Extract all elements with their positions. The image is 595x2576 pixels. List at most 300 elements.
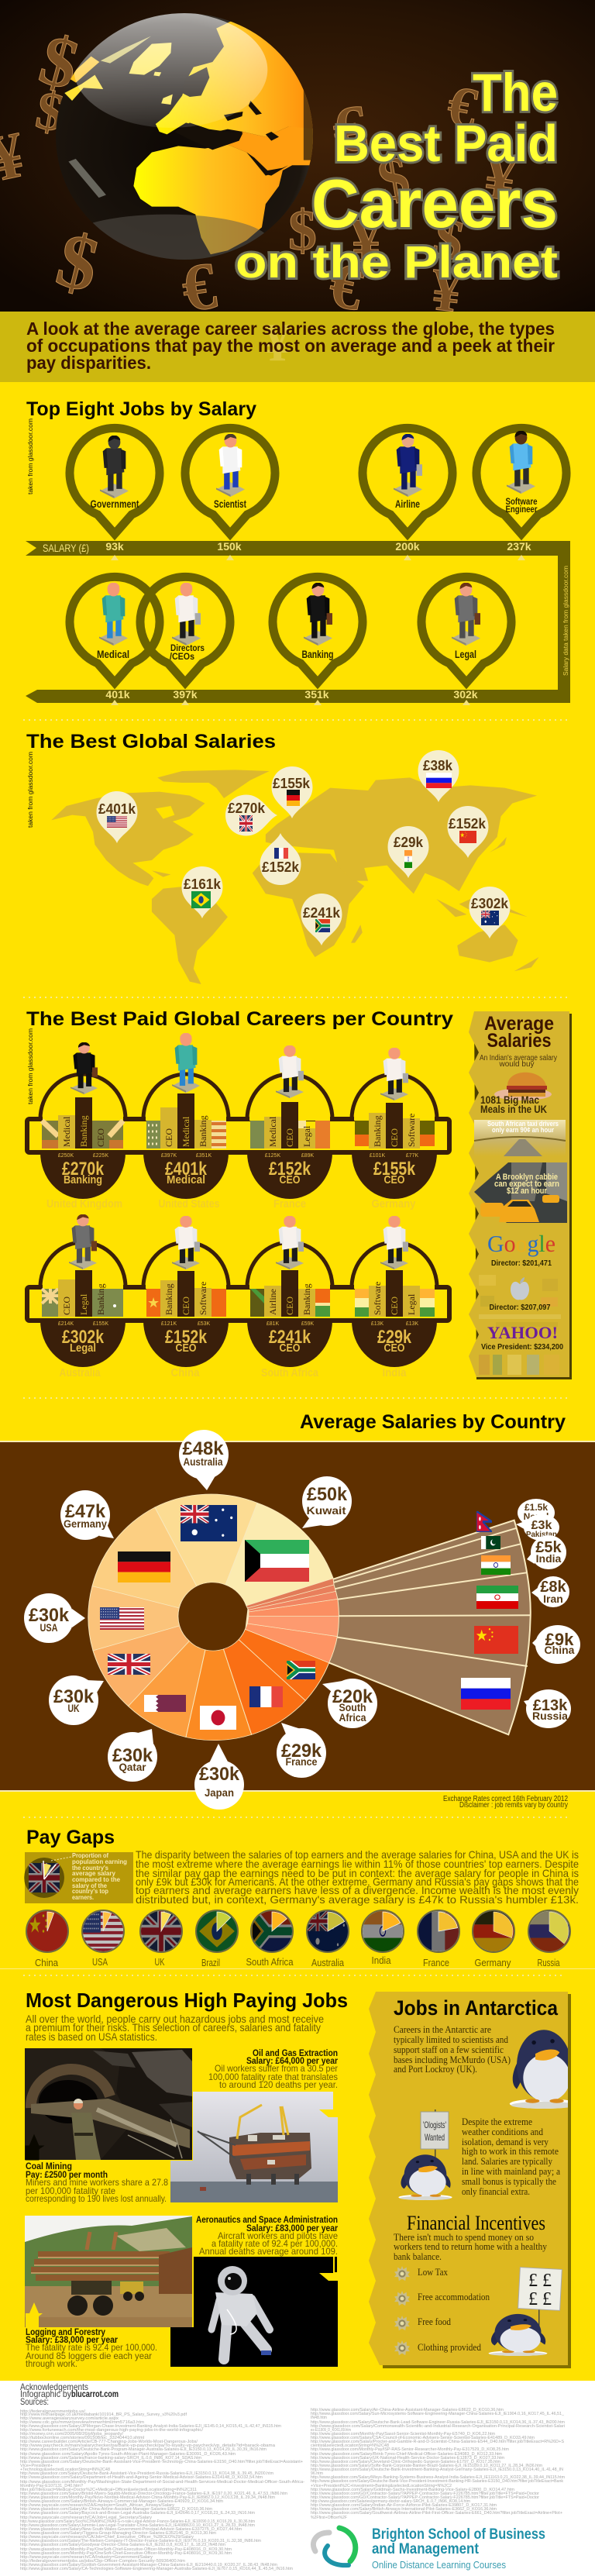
- sources right column: http://www.glassdoor.com/Salary/Southwest-Airlines-Airline-Pilot-First-Officer-Salaries-E661_D40.htm?filter.jobTitleExact=Airline+Pilot+: [311, 2511, 562, 2516]
- unit: France: [247, 1045, 332, 1211]
- marker: South Africa: [301, 894, 342, 945]
- unit: France: £152k: [269, 1159, 311, 1180]
- heading: Average: [484, 1013, 554, 1035]
- seas: [182, 67, 209, 97]
- unit: Australia: £214K: [58, 1321, 74, 1327]
- text: logging: through work.: [26, 2358, 77, 2369]
- paragraph: distributed but, in context, Germany's average salary is £47k to Russia's humbler £13k.: [136, 1893, 579, 1906]
- sources left column: http://federalgovernmentjobs.us/: [20, 2409, 86, 2414]
- flag backdrop: [42, 1121, 123, 1149]
- currency symbols: €: [328, 91, 370, 167]
- legend box: Proportion of: [72, 1851, 108, 1859]
- heading: The Best Paid Global Careers per Country: [26, 1008, 453, 1030]
- text: aeronautics: Aircraft workers and pilots have: [218, 2230, 338, 2241]
- bubble: Germany: £47k: [65, 1501, 106, 1522]
- bubble: Japan: £30k: [199, 1764, 240, 1785]
- logo: Brighton School: Online Distance Learning Courses: [372, 2559, 506, 2571]
- gloss: [74, 12, 267, 128]
- logo: Google: Director: $201,471: [491, 1259, 552, 1268]
- logo: Brighton School: Brighton School of Business: [372, 2526, 545, 2543]
- gap: India: India: [372, 1954, 391, 1966]
- gap: South Africa: South Africa: [246, 1956, 294, 1968]
- job pin: Government: [70, 428, 160, 534]
- heading: [484, 1013, 554, 1052]
- bubble: Kuwait: £50k: [307, 1484, 348, 1505]
- text: coal mining: corresponding to 190 lives lost annually.: [26, 2193, 167, 2204]
- intro: All over the world, people carry out hazardous jobs and most receive: [26, 2013, 324, 2025]
- currency symbols: €: [323, 248, 370, 325]
- text: oil and gas: 100,000 fatality rate that translates: [208, 2071, 338, 2082]
- sources left column: http://www.payscale.com/research/CA/Job=Chief_Executive_Officer_%28CEO%29/Salary: [20, 2535, 194, 2540]
- item: clothing provided: [394, 2340, 481, 2355]
- photo: coal mine: [25, 2048, 192, 2160]
- unit: United Kingdom: £250K: [58, 1153, 74, 1159]
- unit: France: Medical: [267, 1116, 278, 1147]
- logo: Apple: Director: $207,097: [490, 1303, 551, 1312]
- unit: United States: Medical: [167, 1173, 205, 1186]
- salary timeline: SALARY (£): [43, 542, 89, 554]
- bubble: South Africa: £20k: [332, 1686, 373, 1707]
- arrow: logging: [26, 2302, 43, 2327]
- legend box: the country's: [72, 1864, 108, 1872]
- text: oil and gas: to around 120 deaths per year.: [219, 2079, 338, 2090]
- bubble: Kuwait: Kuwait: [307, 1504, 346, 1517]
- exploded fan of low salaries: [246, 1520, 531, 1734]
- text: demand: weather conditions and: [462, 2126, 543, 2137]
- unit: Australia: CEO: [61, 1297, 72, 1315]
- unit: South Africa: £81K: [267, 1321, 279, 1327]
- Eurasia: [156, 15, 318, 137]
- unit: South Africa: South Africa: [261, 1366, 319, 1379]
- unit: China: Banking: [163, 1283, 174, 1315]
- sources right column: http://www.glassdoor.com/Salary/CSA-Council-of-Economic-Advisers-Senior-Scientist-Salaries-E41489_D_KO33,49.htm: [311, 2436, 535, 2440]
- photo: Brooklyn cab: $12 an hour: [507, 1186, 548, 1196]
- currency symbols: $: [49, 216, 107, 308]
- sources left column: http://www.cdc.gov/mmwr/preview/mmwrhtml/mm5716a3.htm: [20, 2420, 144, 2425]
- marker: Brazil: [181, 866, 223, 918]
- note: Big Mac meals: Meals in the UK: [480, 1103, 547, 1115]
- gap: Australia: Australia: [311, 1957, 345, 1968]
- source note: taken from glassdoor.com: [27, 1028, 34, 1104]
- unit: Australia: £302k: [62, 1327, 105, 1348]
- credits: blucarrot.com: [71, 2388, 119, 2399]
- sources right column: http://www.glassdoor.com/Salary/Deutsche-Bank-Lead-Software-Engineer-Russia-Salaries-EJI_IE3150.0,13_KO14,36_IL.37,43_IN200.htm: [311, 2420, 565, 2425]
- bubble: Australia: £48k: [183, 1438, 224, 1459]
- bubble: UK: £30k: [53, 1686, 95, 1707]
- item: free food: Free food: [418, 2316, 451, 2327]
- disclaimer: [443, 1795, 568, 1810]
- bubble: Germany: [60, 1490, 114, 1540]
- sources right column: http://www.glassdoor.com/GD/Contractor-Salary/?APPEP-Contractor-Salary-F226785.htm?filter.jobTitle=FTS=Paid+Doctor: [311, 2495, 539, 2500]
- marker: Germany: £155k: [273, 776, 311, 791]
- bubble: UK: UK: [68, 1702, 79, 1714]
- salary timeline: 93k: [105, 540, 124, 553]
- bubble: Qatar: £30k: [112, 1745, 153, 1766]
- sources right column: http://www.glassdoor.com/Salary/Goldman-Sachs-Investment-Banking-Vice-Salary-E2800_D_KO14,47.htm: [311, 2488, 514, 2492]
- sources left column: http://www.glassdoor.com/Salaries/france-banking-salary-SRCH_IL.0,6_IN86_KO7,14_SDAS.htm: [20, 2456, 201, 2461]
- salary timeline: [26, 540, 570, 705]
- icon: burger: [494, 1073, 552, 1100]
- unit: France: France: [273, 1197, 306, 1211]
- text: demand: high to work in this remote: [462, 2145, 559, 2157]
- disclaimer: Disclaimer : job remits vary by country: [459, 1801, 568, 1810]
- unit: United States: £401k: [165, 1159, 208, 1180]
- panel: top eight jobs: [26, 398, 570, 705]
- unit: South Africa: CEO: [284, 1297, 295, 1315]
- sources left column: Monthly-Pay-E107131_D40.htm?: [20, 2484, 83, 2488]
- sources left column: http://www.glassdoor.com/Salary/Soci%C3%A9t%C3%A9-G-n-rale-Legal-Advisor-France-Salaries-EJI_IE10090.0,15_KO16,29_IL.30,36.htm: [20, 2519, 255, 2524]
- unit: Germany: £77K: [406, 1153, 418, 1159]
- bubble: Nepal: £1.5k: [524, 1502, 548, 1513]
- text: incentives: [394, 2231, 547, 2262]
- unit: Australia: £155K: [93, 1321, 108, 1327]
- bubble: India: £5k: [535, 1539, 562, 1556]
- unit: India: [352, 1216, 437, 1379]
- bubble: France: France: [285, 1755, 318, 1768]
- sources left column: http://www.payscale.com/research/CA/Job=Legal_Secretary/Salary: [20, 2516, 153, 2520]
- credits: Acknowledgements: [20, 2381, 88, 2392]
- job pin: Directors/CEOs: /CEOs: [170, 651, 194, 662]
- salary timeline: 397k: [173, 688, 198, 701]
- legend box: country's top: [72, 1887, 108, 1895]
- salary timeline: 200k: [395, 540, 420, 553]
- world map: [51, 770, 539, 984]
- heading: The Best Global Salaries: [26, 731, 276, 752]
- bubble: USA: USA: [40, 1621, 57, 1634]
- sources right column: http://www.glassdoor.com/Salary/Cleveland-Clinic-Orthopedic-Surgeon-Salaries-E1797_D_KO17,35.htm: [311, 2460, 500, 2464]
- title: Careers: [311, 165, 558, 242]
- gap: USA: USA: [92, 1956, 108, 1968]
- job pin: Government: Government: [90, 498, 139, 510]
- sources left column: http://www.payscale.com/research/ZA/Employer=South_African_Airways/Salary: [20, 2503, 175, 2508]
- panel: best paid careers per country: [26, 1008, 453, 1379]
- sources left column: http://www.glassdoor.com/Monthly-Pay/OneSoft-Chief-Executive-Officer-Monthly-Pay-E408016_D_KO9,30.htm: [20, 2551, 232, 2556]
- item: free accommodation: [394, 2291, 490, 2306]
- sources left column: http://www.glassdoor.com/Salary/Air-China-Airline-Assistant-Manager-Salaries-E8622_D_KO10,36.htm: [20, 2507, 212, 2512]
- currency symbols: [0, 19, 521, 326]
- text: coal mining: Miners and mine workers share a 27.8: [26, 2177, 168, 2188]
- unit: India: £29k: [377, 1327, 412, 1348]
- unit: Australia: Legal: [78, 1293, 89, 1315]
- title: on the Planet: [236, 237, 558, 288]
- unit: United States: United States: [158, 1197, 220, 1211]
- bubble: Nepal: [518, 1499, 555, 1527]
- panel: pay gaps: [24, 1827, 579, 1968]
- sources left column: http://www.glassdoor.com/Monthly-Pay/Washington-State-Department-of-Social-and-Health-Services-Medical-Doctor-Medical-Officer-South-Africa-: [20, 2480, 304, 2485]
- currency symbols: €: [442, 74, 482, 141]
- text: careers: Careers in the Antarctic are: [394, 2023, 491, 2035]
- marker: USA: £401k: [98, 801, 136, 817]
- marker: France: £152k: [262, 859, 300, 875]
- sources left column: http://www.glassdoor.com/Monthly-Pay/OneSoft-Chief-Executive-Officer-Monthly-Pay-E408016_D_KO9,30.htm: [20, 2547, 232, 2552]
- bubble: South Africa: Africa: [339, 1711, 366, 1724]
- text: demand: isolation, demand is very: [462, 2136, 549, 2147]
- job pin: Legal: [421, 577, 511, 683]
- sources left column: +Technology&selectedLocationString=IN%2C48: [20, 2468, 110, 2472]
- bubble: Pakistan: Pakistan: [526, 1531, 557, 1539]
- job pin: Banking: Banking: [302, 648, 333, 660]
- text: careers: bases including McMurdo (USA): [394, 2054, 511, 2065]
- bubble: India: India: [536, 1552, 562, 1565]
- unit: India: £13K: [371, 1321, 383, 1327]
- bubble: Qatar: [108, 1729, 157, 1782]
- intro: rates is based on USA statistics.: [26, 2030, 157, 2043]
- text: careers: [394, 2023, 511, 2075]
- text: logging: Around 85 loggers die each year: [26, 2350, 152, 2361]
- gap: Germany: [473, 1910, 514, 1968]
- job pin: Medical: Medical: [97, 648, 129, 660]
- unit: China: [143, 1216, 229, 1379]
- job pin: Scientist: [185, 428, 275, 534]
- text: oil and gas: [208, 2047, 338, 2090]
- gap: Russia: Russia: [538, 1957, 560, 1968]
- job pin: Airline: [363, 428, 452, 534]
- sources right column: http://www.glassdoor.com/Salary/Deutsche-Bank-Vice-President-Investment-Banking-HR-Salaries-E3150_D40.htm?filter.jobTitleExact=Bank: [311, 2479, 564, 2484]
- marker: Australia: £302k: [471, 896, 509, 911]
- icon: penguin large: [510, 2030, 568, 2109]
- currency symbols: €: [177, 248, 221, 326]
- unit: China: CEO: [181, 1297, 191, 1315]
- bubble: France: £29k: [281, 1741, 322, 1762]
- heading: Salaries: [487, 1030, 552, 1052]
- sources right column: +Vice+President%2C+Investment+Banking&selectedLocationString=N%2C2: [311, 2484, 452, 2488]
- marker: USA: [96, 791, 138, 843]
- marker: UK: [225, 795, 277, 835]
- gap: UK: UK: [155, 1956, 165, 1968]
- text: coal mining: [26, 2161, 168, 2204]
- flag backdrop: [146, 1289, 226, 1317]
- marker: France: [260, 833, 301, 885]
- intro text: A look at the average career salaries across the globe, the types: [26, 319, 555, 339]
- job pin: Software Engineer: Software: [505, 496, 538, 507]
- currency symbols: $: [32, 81, 69, 144]
- unit: United States: CEO: [163, 1128, 174, 1147]
- unit: United Kingdom: £270k: [62, 1159, 105, 1180]
- gap: France: [418, 1910, 459, 1968]
- gap: Brazil: Brazil: [201, 1957, 220, 1968]
- icon: penguin with pound sign: £ £: [528, 2289, 552, 2309]
- panel: jobs in Antarctica: [369, 1992, 578, 2368]
- legend box: average salary: [72, 1869, 115, 1877]
- salary timeline: 237k: [507, 540, 531, 553]
- credits: Infographic by: [20, 2388, 71, 2399]
- sources left column: http://www.glassdoor.com/Salary/The-Nielsen-Company-IT-Director-France-Salaries-EJI_IE9776.0,19_KO20,31_IL.32,38_IN86.htm: [20, 2539, 261, 2543]
- photo: Brooklyn cab: A Brooklyn cabbie: [496, 1173, 558, 1182]
- unit: Australia: Australia: [59, 1366, 101, 1379]
- job pin: Software Engineer: Engineer: [505, 504, 538, 515]
- bubble: Pakistan: £3k: [531, 1519, 552, 1532]
- intro text: of occupations that pay the most on average and a peek at their: [26, 336, 555, 356]
- photo: oil rig: [170, 2092, 338, 2202]
- bubble: Germany: Germany: [64, 1517, 107, 1530]
- unit: France: CEO: [279, 1173, 301, 1186]
- gap: China: [26, 1910, 69, 1966]
- sources right column: http://www.glassdoor.com/Salary/Air-China-Airline-Assistant-Manager-Salaries-E8622_D_KO10,36.htm: [311, 2408, 504, 2412]
- flag backdrop: [355, 1121, 435, 1146]
- title: [236, 63, 558, 288]
- sources left column: http://www.glassdoor.com/Salary/CA-Technologies-Software-Engineering-Manager-Australia-Salaries-EJI_IE767.0,15_KO16,44_IL.45,54_IN16.htm: [20, 2567, 293, 2571]
- gap: UK: [140, 1910, 182, 1968]
- intro text: [26, 319, 555, 373]
- note: Big Mac meals: 1081 Big Mac: [480, 1093, 539, 1106]
- sources right column: http://www.glassdoor.com/Salary/Misys-Banking-Systems-Business-Analyst-India-Salaries-EJI_IE11163.0,21_KO22,38_IL.39,44_IN115.htm: [311, 2475, 565, 2480]
- unit: United Kingdom: CEO: [95, 1128, 106, 1147]
- globe: [56, 12, 318, 269]
- photo: South African road: [474, 1120, 566, 1156]
- logo: Yahoo: [481, 1323, 563, 1352]
- sources left column: http://www.glassdoor.com/Salary/JPMorgan-Chase-Investment-Banking-Analyst-India-Salaries-EJI_IE145.0,14_KO15,41_IL.42,47_IN115.htm: [20, 2424, 281, 2429]
- unit: China: £152k: [165, 1327, 208, 1348]
- bubble: Iran: £8k: [540, 1579, 567, 1596]
- sources right column: 96.htm: [311, 2471, 323, 2476]
- sources right column: http://www.glassdoor.com/Salary/UK-National-Health-Service-Doctor-Salaries-E12873_D_KO27,33.htm: [311, 2456, 504, 2461]
- item: free food: [394, 2316, 451, 2330]
- sources left column: http://www.michaelpage.co.uk/mediabank/101914_BR_PS_Salary_Survey_v3%20v3.pdf: [20, 2412, 187, 2417]
- currency symbols: $: [32, 19, 87, 105]
- sources right column: http://www.glassdoor.com/Salary/Procter-and-Gamble-R-and-D-Scientist-China-Salaries-E544_D40.htm?filter.jobTitleExact=R%26D+S: [311, 2440, 565, 2444]
- sources right column: http://www.glassdoor.com/Monthly-Pay/ISP-RAS-Senior-Researcher-Monthly-Pay-E317529_D_KO8,25.htm: [311, 2447, 509, 2452]
- unit: India: India: [383, 1366, 407, 1379]
- sources left column: http://www.glassdoor.com/Salary/British-Airways-Commercial-Manager-Salaries-E40929_D_KO16,34.htm: [20, 2499, 223, 2504]
- text: logging: Logging and Forestry: [26, 2326, 105, 2337]
- Greenland and North America: [129, 43, 171, 75]
- sources left column: http://tubbockonline.com/stories/091508/loc_332404410.shtml: [20, 2436, 144, 2440]
- unit: Germany: £101K: [370, 1153, 385, 1159]
- marker: China: [448, 806, 488, 858]
- sources left column: http://www.glassdoor.com/Salary/Scottish-Government-Assistant-Manager-China-Salaries-EJI_IE210440.0,19_KO20,37_IL.38,43_IN48.htm: [20, 2563, 277, 2567]
- unit: United States: Banking: [198, 1115, 208, 1147]
- unit: Germany: Banking: [372, 1115, 383, 1147]
- sources left column: http://www.glassdoor.com/Salary/Department-of-Health-and-Ageing-Senior-Medical-Advisor-Salaries-E314148_D_KO32,54.htm: [20, 2475, 263, 2480]
- heading: Top Eight Jobs by Salary: [26, 398, 256, 420]
- sources right column: http://www.glassdoor.com/Salary/Indian-Air-Force-Airforce-Pilot-Salaries-E39807_D_KO17,31.htm: [311, 2503, 497, 2508]
- sources right column: http://www.glassdoor.com/Salary/Brink-Tyres-Chief-Medical-Officer-Salaries-E34083_D_KO12,33.htm: [311, 2452, 502, 2457]
- icon: penguin with pound sign: £ £: [528, 2271, 552, 2291]
- bubble: Russia: [524, 1689, 571, 1728]
- currency symbols: $: [428, 205, 469, 274]
- unit: China: £121K: [161, 1321, 177, 1327]
- currency symbols: $: [288, 199, 317, 263]
- photo: logging: [25, 2216, 192, 2327]
- sources left column: http://www.careerbuilder.com/Article/CB-777-Changing-Jobs-Worlds-Most-Dangerous-Jobs/: [20, 2440, 198, 2444]
- frames: [27, 1119, 449, 1321]
- flag backdrop: [250, 1289, 330, 1317]
- subheading: financial incentives: Financial Incentives: [407, 2212, 545, 2234]
- credits: [20, 2381, 119, 2407]
- unit: Germany: Software: [406, 1114, 417, 1147]
- gap: South Africa: [246, 1910, 294, 1968]
- logo mark: [313, 2528, 356, 2565]
- text: incentives: bank balance.: [394, 2251, 442, 2262]
- text: demand: only financial extra.: [462, 2185, 530, 2197]
- unit: France: Legal: [301, 1125, 312, 1147]
- job pin: Medical: [70, 577, 160, 683]
- logo: Brighton School: and Management: [372, 2541, 480, 2557]
- flag backdrop: [42, 1289, 123, 1317]
- legend box: earners.: [72, 1893, 94, 1901]
- arrow: oil: [319, 2092, 338, 2117]
- sidebar: average salaries: [469, 1011, 572, 1379]
- salary timeline: 401k: [105, 688, 130, 701]
- unit: China: CEO: [175, 1341, 197, 1355]
- sources right column: http://www.glassdoor.com/GD/Contractor-Salary/?APPEP-Contractor-Salary-F226785.htm?filter.jobTitle=FTS=Paid+Doctor: [311, 2492, 539, 2496]
- unit: United States: £397K: [161, 1153, 177, 1159]
- bubble: Pakistan: [516, 1514, 559, 1541]
- text: demand: small bonus is typically the: [462, 2175, 556, 2187]
- job pin: Scientist: Scientist: [214, 498, 246, 510]
- photo: South African road: South African taxi drivers: [487, 1120, 559, 1128]
- text: careers: typically limited to scientists and: [394, 2034, 508, 2045]
- gap: China: China: [35, 1957, 59, 1968]
- unit: Germany: CEO: [389, 1128, 400, 1147]
- bubble: France: [277, 1723, 326, 1778]
- bubble: Iran: [531, 1576, 569, 1607]
- unit: India: Software: [372, 1282, 383, 1315]
- bubble: Australia: [179, 1430, 229, 1490]
- unit: South Africa: £241k: [269, 1327, 311, 1348]
- unit: France: £125K: [265, 1153, 280, 1159]
- unit: United States: £351K: [196, 1153, 212, 1159]
- legend box: [24, 1851, 133, 1903]
- icon: penguin with sign: 'Ologists': [423, 2120, 446, 2130]
- unit: India: Legal: [406, 1293, 417, 1315]
- text: oil and gas: Salary: £64,000 per year: [246, 2055, 338, 2066]
- photo: South African road: only earn 90¢ an hour: [492, 1126, 554, 1134]
- unit: United Kingdom: Banking: [78, 1115, 89, 1147]
- job pin: Directors/CEOs: [140, 577, 230, 683]
- unit: United States: Medical: [181, 1116, 191, 1147]
- bubble: Russia: £13k: [533, 1697, 568, 1714]
- text: demand: [462, 2116, 560, 2197]
- sources left column: http://www.glassdoor.com/Monthly-Pay/Novo-Nordisk-Medical-Advisor-China-Monthly-Pay-EJI_IE8982.0,12_KO13,28_IL.29,34_IN48.htm: [20, 2495, 275, 2500]
- text: demand: Despite the extreme: [462, 2116, 532, 2127]
- note: Big Mac meals: [480, 1093, 547, 1115]
- marker: India: [387, 826, 429, 878]
- marker: UK: £270k: [228, 801, 266, 816]
- note: Indian salary: [480, 1054, 557, 1069]
- sources left column: http://federalgovernmentjobs.us/jobs/Cbp-Officer-Complex-Security-50936400.htm: [20, 2559, 185, 2564]
- sources left column: [20, 2409, 304, 2571]
- bubble: China: £9k: [545, 1630, 574, 1649]
- bubble: South Africa: [322, 1679, 377, 1728]
- unit: Germany: Germany: [372, 1197, 416, 1211]
- flag backdrop: [146, 1121, 226, 1149]
- heading: Jobs in Antarctica: [394, 1996, 559, 2020]
- text: aeronautics: [196, 2214, 338, 2257]
- sources right column: es-E11909_D_KO61,89.htm: [311, 2428, 351, 2433]
- logo: Brighton School: [313, 2526, 545, 2571]
- text: aeronautics: a fatality rate of 92.4 per 100,000.: [212, 2238, 338, 2249]
- unit: India: CEO: [384, 1341, 405, 1355]
- job pin: Legal: Legal: [455, 648, 476, 660]
- marker: Russia: £38k: [423, 758, 453, 773]
- gap: France: France: [423, 1957, 449, 1968]
- unit: France: CEO: [284, 1128, 295, 1147]
- text: logging: The fatality rate is 92.4 per 100,000.: [26, 2342, 157, 2353]
- sources left column: http://www.payscale.com/research/CA/Industry=Government/Salary: [20, 2555, 153, 2560]
- sources left column: http://money.cnn.com/2005/08/26/pf/jobs_jeopardy/: [20, 2432, 124, 2437]
- bubble: Russia: Russia: [532, 1710, 568, 1722]
- sources left column: http://www.glassdoor.com/Salary/Baycock-and-Brown-Legal-Australia-Salaries-EJI_E42646.0,17_KO18,23_IL.24,33_IN16.htm: [20, 2511, 255, 2516]
- job pin: Airline: Airline: [395, 498, 420, 510]
- item: low tax: Low Tax: [418, 2266, 448, 2278]
- sources right column: %2Ffirst+Officer%2F: [311, 2516, 347, 2520]
- intro strip: [0, 312, 595, 382]
- sources right column: [311, 2408, 565, 2520]
- unit: India: £13K: [406, 1321, 418, 1327]
- bubble: South Africa: South: [339, 1701, 366, 1713]
- sources left column: http://www.fortuneeach.com/the-most-dangerous-high-paying-jobs-in-the-world-infographic/: [20, 2428, 204, 2433]
